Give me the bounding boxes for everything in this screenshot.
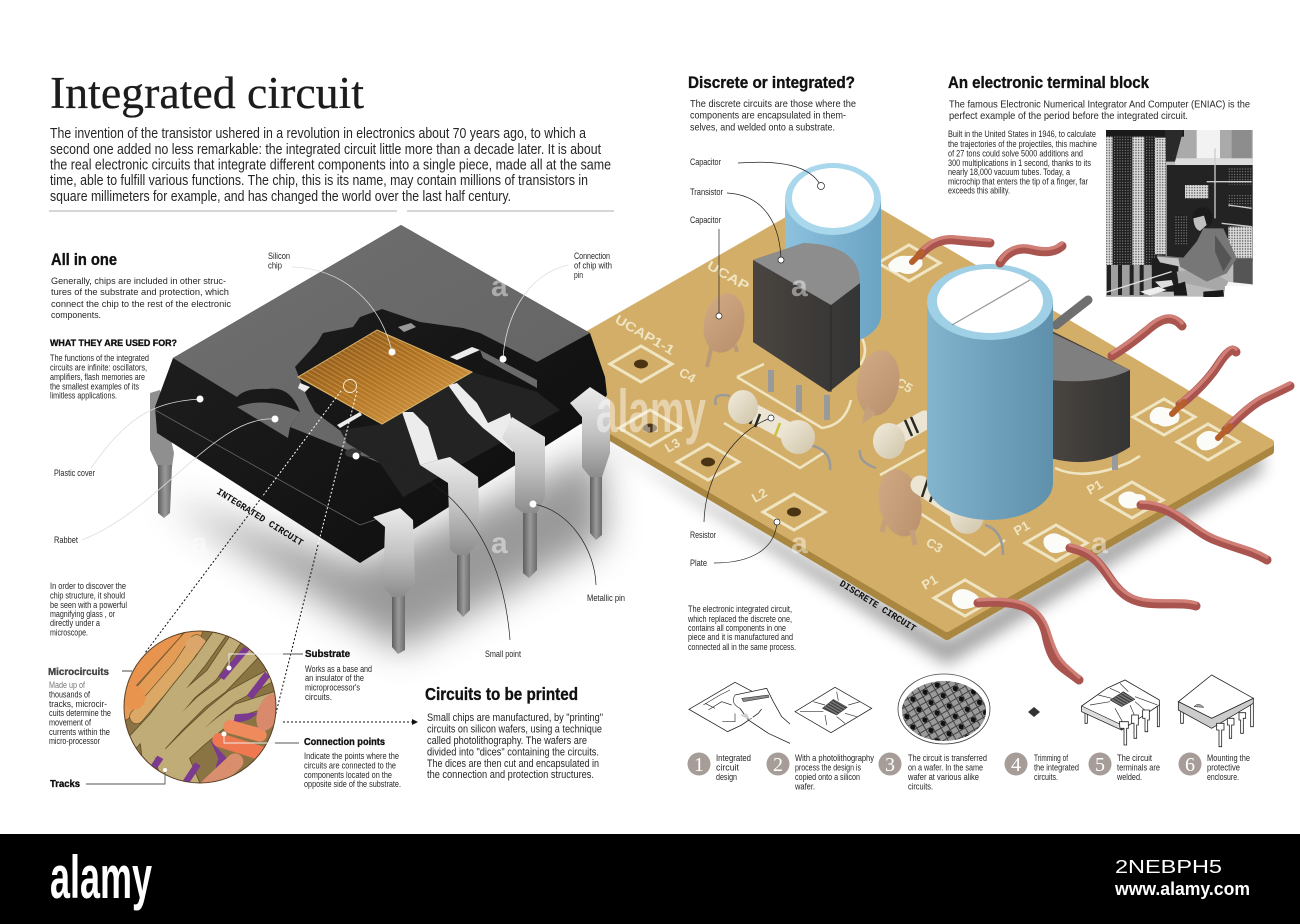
grey wire: [1056, 300, 1088, 325]
silicon die: [298, 330, 472, 424]
tracks label: Tracks: [50, 778, 80, 790]
substrate text: circuits.: [305, 692, 332, 702]
microcircuits text: Made up of: [49, 680, 85, 690]
step 3: wafer at various alike: [907, 772, 979, 782]
step 4: circuits.: [1034, 772, 1058, 782]
step 3: [878, 752, 987, 792]
right transistor: [1050, 330, 1130, 470]
chip part labels: Plastic cover: [54, 468, 95, 478]
circuits to be printed: circuits on silicon wafers, using a technique: [427, 724, 602, 736]
site url: www.alamy.com: [1114, 879, 1250, 899]
board labels: C4: [676, 365, 699, 386]
chip part labels: Rabbet: [54, 535, 78, 545]
intro text block: square millimeters for example, and has changed the world over the last half century.: [50, 189, 511, 205]
board labels: L2: [749, 485, 770, 506]
step 3: The circuit is transferred: [908, 753, 987, 763]
step 5: terminals are: [1117, 762, 1160, 772]
microcircuits text: cuits determine the: [49, 708, 111, 718]
circuits to be printed: [425, 684, 603, 781]
chip top cover: [173, 225, 590, 463]
microscope note: directly under a: [50, 618, 100, 628]
circuits to be printed: the connection and protection structures.: [427, 769, 594, 781]
microscope note: chip structure, it should: [50, 590, 125, 600]
wire copper ends: [912, 252, 1230, 438]
discrete component labels: Resistor: [690, 530, 716, 540]
resistors: [715, 390, 1003, 555]
step 2: process the design is: [795, 762, 861, 772]
image id: 2NEBPH5: [1115, 857, 1222, 877]
electronic terminal block: microchip that enters the tip of a finger, far: [948, 176, 1088, 186]
substrate text: [305, 648, 372, 702]
left column: all in one: All in one: [51, 251, 117, 269]
microcircuits text: movement of: [49, 718, 91, 728]
title: Integrated circuit: [50, 68, 364, 118]
discrete vs integrated note: connected all in the same process.: [688, 642, 796, 652]
discrete or integrated: selves, and welded onto a substrate.: [690, 122, 835, 134]
electronic terminal block: [948, 73, 1250, 196]
discrete vs integrated note: [687, 604, 796, 652]
silkscreen pads: [610, 245, 1239, 616]
circuits to be printed: Circuits to be printed: [425, 684, 578, 704]
microcircuits text: micro-processor: [49, 736, 100, 746]
step 5: [1088, 752, 1160, 782]
board labels: [612, 258, 1105, 593]
transistor: [753, 243, 860, 420]
red wires: [920, 237, 1290, 680]
left column: what they are used for: [50, 338, 177, 400]
watermarks: a: [791, 270, 808, 303]
microcircuits text: tracks, microcir-: [49, 699, 107, 709]
step 2: 2: [773, 754, 783, 776]
discrete component labels: Capacitor: [690, 215, 721, 225]
discrete component leaders: [704, 162, 824, 563]
step 1: Integrated: [716, 753, 751, 763]
chip black body: [155, 225, 607, 563]
step 3: 3: [885, 754, 895, 776]
discrete circuit board illustration: [518, 163, 1290, 680]
left column: what they are used for: amplifiers, flash memories are: [50, 372, 145, 382]
electronic terminal block: Built in the United States in 1946, to calculate: [948, 129, 1096, 139]
discrete component labels: Plate: [690, 558, 707, 568]
intro text block: the real electronic circuits that integrate different components into a single piece, made all at the same: [50, 158, 611, 174]
alamy logo: alamy: [50, 844, 152, 911]
connection points text: components located on the: [304, 770, 392, 780]
connection points text: [304, 736, 401, 789]
board labels: P1: [1011, 518, 1032, 539]
step 4 icon: die: [1028, 707, 1040, 717]
back capacitor: [785, 163, 881, 345]
left column: what they are used for: circuits are infinite: oscillators,: [50, 362, 147, 372]
step 3: on a wafer. In the same: [908, 762, 983, 772]
step 4: 4: [1011, 754, 1021, 776]
step 2: copied onto a silicon: [795, 772, 860, 782]
electronic terminal block: The famous Electronic Numerical Integrator And Computer (ENIAC) is the: [949, 98, 1250, 110]
chip part labels: Small point: [485, 649, 521, 659]
chip shadow: [165, 450, 605, 650]
circuits to be printed: The dices are then cut and encapsulated in: [427, 758, 599, 770]
discrete or integrated: [688, 73, 856, 134]
board labels: UCAP: [704, 258, 752, 294]
small point hole: [345, 448, 361, 458]
ENIAC photo: [1104, 130, 1253, 298]
electronic terminal block: perfect example of the period before the integrated circuit.: [949, 110, 1188, 122]
discrete vs integrated note: piece and it is manufactured and: [688, 632, 793, 642]
step 5 icon: terminals: [1082, 680, 1159, 745]
chip part labels: Metallic pin: [587, 593, 625, 603]
watermarks: a: [1091, 527, 1108, 560]
left column: all in one: tures of the substrate and protection, which: [51, 287, 229, 298]
circuits to be printed: divided into "dices" containing the circuits.: [427, 746, 599, 758]
connection points text: Indicate the points where the: [304, 751, 399, 761]
microscope note: microscope.: [50, 628, 88, 638]
integrated circuit chip illustration: [150, 225, 610, 654]
magnified microcircuit circle: [123, 631, 285, 788]
connection points text: opposite side of the substrate.: [304, 779, 401, 789]
dotted arrow: [283, 719, 418, 725]
step 4: Trimming of: [1034, 753, 1068, 763]
circle leaders: [86, 654, 303, 784]
salmon contact blocks: [208, 727, 267, 787]
microcircuits text: Microcircuits: [48, 666, 109, 678]
board labels: L3: [662, 435, 683, 456]
step 1: circuit: [716, 762, 739, 772]
substrate text: Works as a base and: [305, 664, 372, 674]
discrete or integrated: components are encapsulated in them-: [690, 110, 846, 122]
left column: all in one: connect the chip to the rest of the electronic: [51, 299, 231, 310]
discrete component labels: [690, 157, 723, 568]
substrate text: Substrate: [305, 648, 350, 660]
discrete or integrated: Discrete or integrated?: [688, 73, 855, 92]
left column: what they are used for: the smallest examples of its: [50, 382, 139, 392]
step 6: Mounting the: [1207, 753, 1250, 763]
step 4: the integrated: [1034, 762, 1079, 772]
step 1 icon: hand drawing design: [689, 682, 790, 743]
chip front seam: [155, 410, 380, 525]
left column: what they are used for: WHAT THEY ARE USED FOR?: [50, 338, 177, 349]
metallic pins: [373, 387, 610, 654]
microscope note: In order to discover the: [50, 581, 126, 591]
electronic terminal block: the trajectories of the projectiles, this machine: [948, 139, 1097, 149]
dotted magnifier lines: [145, 391, 357, 717]
microcircuits text: currents within the: [49, 727, 110, 737]
chip part labels: chip: [268, 260, 282, 270]
intro text block: The invention of the transistor ushered in a revolution in electronics about 70 years ago, to which a: [50, 126, 587, 142]
watermarks: a: [491, 270, 508, 303]
electronic terminal block: 300 multiplications in 1 second, thanks to its: [948, 158, 1091, 168]
chip leaders and dots: [82, 265, 596, 640]
step 6: enclosure.: [1207, 772, 1239, 782]
board shadow: [610, 445, 1262, 665]
left column: all in one: [51, 251, 231, 321]
intro text block: second one added no less remarkable: the integrated circuit little more than a decade later. It is about: [50, 142, 601, 158]
circuits to be printed: called photolithography. The wafers are: [427, 735, 587, 747]
purple substrate: [151, 647, 270, 784]
left column: all in one: Generally, chips are included in other struc-: [51, 276, 226, 287]
step 1: 1: [694, 754, 704, 776]
connection points text: Connection points: [304, 736, 385, 748]
discrete or integrated: The discrete circuits are those where the: [690, 98, 856, 110]
photo: operator: [1176, 270, 1228, 291]
notch floor: [237, 403, 300, 438]
discrete vs integrated note: contains all components in one: [688, 623, 786, 633]
board labels: UCAP1-1: [612, 312, 677, 358]
electronic terminal block: exceeds this ability.: [948, 186, 1010, 196]
microcircuits text: [48, 666, 111, 746]
board caption: DISCRETE CIRCUIT: [837, 578, 918, 634]
left column: what they are used for: limitless applications.: [50, 390, 117, 400]
watermarks: a: [791, 527, 808, 560]
left column: what they are used for: The functions of the integrated: [50, 353, 149, 363]
microscope note: [50, 581, 127, 638]
left column: all in one: components.: [51, 310, 101, 321]
ceramic capacitors: [698, 289, 928, 545]
watermarks: a: [491, 527, 508, 560]
intro text block: [50, 126, 611, 205]
step 4: [1004, 752, 1079, 782]
electronic terminal block: of 27 tons could solve 5000 additions and: [948, 148, 1083, 158]
discrete component labels: Transistor: [690, 187, 723, 197]
footer band: [0, 834, 1300, 924]
microscope note: be seen with a powerful: [50, 600, 127, 610]
photo: bottom of racks: [1152, 258, 1178, 292]
back pins: [150, 390, 174, 518]
watermarks: [191, 270, 1108, 560]
circuits to be printed: Small chips are manufactured, by "printing": [427, 712, 603, 724]
orange tracks: [123, 632, 197, 717]
watermarks: a: [191, 527, 208, 560]
step 1: design: [716, 772, 737, 782]
discrete vs integrated note: which replaced the discrete one,: [687, 614, 792, 624]
small circular mark on die: [344, 380, 356, 392]
step 6: [1178, 752, 1250, 782]
solder blobs: [888, 256, 1223, 609]
photo: dark machine room: [1167, 165, 1253, 262]
step 6 icon: enclosure: [1178, 675, 1253, 747]
board labels: C3: [924, 535, 945, 556]
board labels: C5: [894, 375, 915, 396]
photo: tube racks: [1104, 130, 1184, 137]
step 2: [766, 752, 874, 792]
cavity slot strip: [480, 350, 537, 388]
electronic terminal block: nearly 18,000 vacuum tubes. Today, a: [948, 167, 1070, 177]
microscope note: magnifying glass , or: [50, 609, 115, 619]
step 2: With a photolithography: [795, 753, 874, 763]
microcircuits text: thousands of: [49, 690, 90, 700]
board labels: P1: [1084, 477, 1105, 498]
electronic terminal block: An electronic terminal block: [948, 73, 1149, 92]
board holes: [634, 360, 801, 516]
discrete component labels: Capacitor: [690, 157, 721, 167]
step 6: protective: [1207, 762, 1240, 772]
step 2 icon: photolithography: [795, 687, 872, 733]
chip cavity floor: [340, 372, 560, 497]
chip caption: INTEGRATED CIRCUIT: [214, 486, 305, 549]
step 6: 6: [1185, 754, 1195, 776]
discrete vs integrated note: The electronic integrated circuit,: [688, 604, 792, 614]
step 1: [688, 752, 751, 782]
chip part labels: pin: [574, 270, 583, 280]
inner leads: [298, 323, 515, 465]
step 3 icon: wafer: [898, 674, 990, 744]
step 5: 5: [1095, 754, 1105, 776]
board surface: [518, 190, 1270, 628]
main capacitor: [927, 264, 1053, 520]
watermarks: alamy: [596, 378, 706, 445]
chip part labels: of chip with: [574, 260, 612, 270]
photo: floor: [1223, 282, 1253, 297]
photo: windows: [1175, 130, 1253, 163]
tan tracks: [133, 633, 280, 788]
substrate text: microprocessor's: [305, 682, 360, 692]
step 3: circuits.: [908, 782, 933, 792]
chip part labels: [54, 251, 625, 659]
step 2: wafer.: [794, 782, 815, 792]
chip part labels: Silicon: [268, 251, 290, 261]
step 5: The circuit: [1117, 753, 1152, 763]
board labels: P1: [919, 572, 940, 593]
connection points text: circuits are connected to the: [304, 760, 396, 770]
substrate text: an insulator of the: [305, 673, 364, 683]
intro text block: time, able to fulfill various functions. The chip, this is its name, may contain millions of transistors in: [50, 173, 588, 189]
step 5: welded.: [1116, 772, 1142, 782]
chip part labels: Connection: [574, 251, 610, 261]
board thickness: [518, 375, 1270, 636]
